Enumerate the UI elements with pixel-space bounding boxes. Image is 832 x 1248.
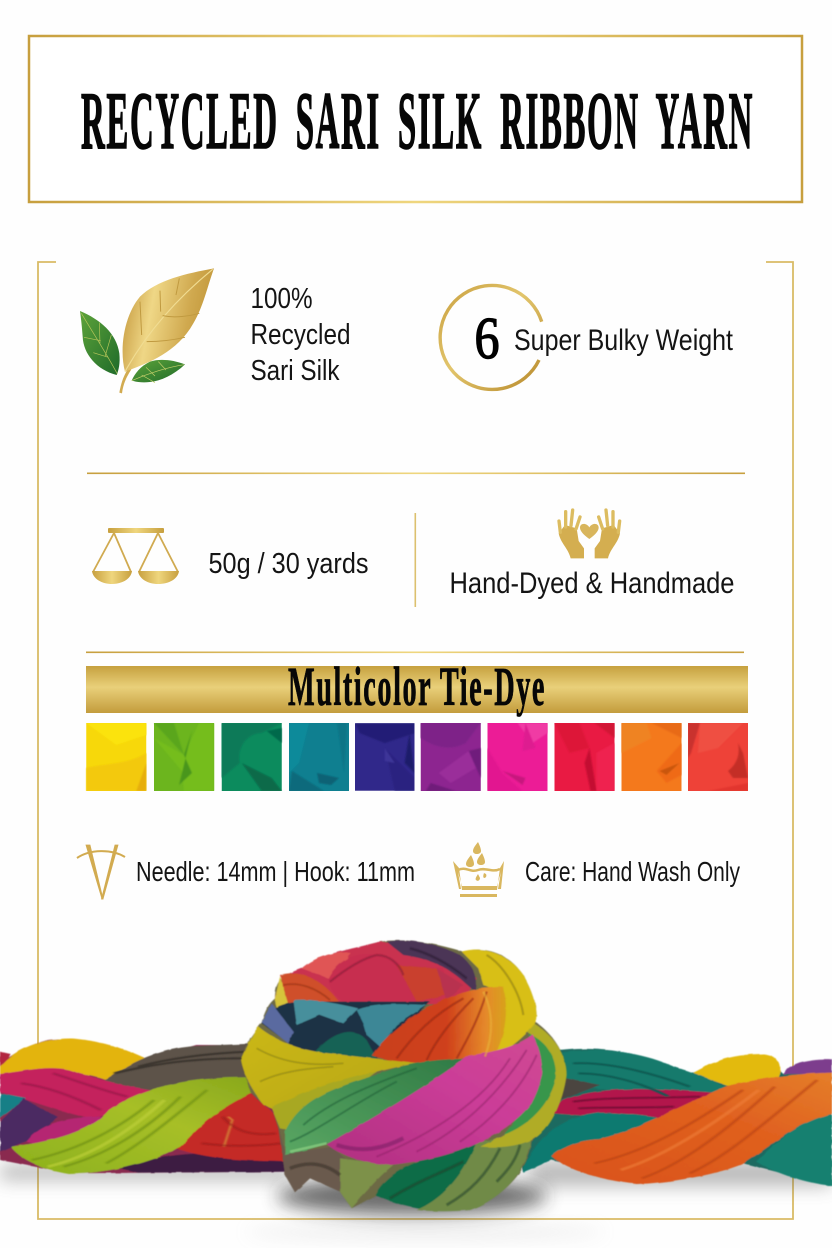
swatch: crimson bbox=[554, 723, 615, 791]
icon: hand wash basin bbox=[453, 842, 504, 897]
yarn braids bbox=[0, 1039, 832, 1186]
swatch: yellow bbox=[86, 723, 147, 791]
banner: multicolor tie-dye: Multicolor Tie-Dye bbox=[288, 656, 546, 717]
text: weight and length: 50g / 30 yards bbox=[208, 548, 368, 580]
floor shadows bbox=[0, 1160, 832, 1238]
swatch: magenta bbox=[487, 723, 548, 791]
icon: balance scale bbox=[92, 528, 179, 584]
text: super bulky weight: Super Bulky Weight bbox=[514, 324, 734, 357]
swatch: green bbox=[154, 723, 215, 791]
left hand bbox=[559, 510, 584, 558]
text: 100% recycled sari silk bbox=[250, 283, 350, 387]
swatch: coral bbox=[688, 723, 748, 791]
text: hand-dyed and handmade: Hand-Dyed & Handmade bbox=[450, 567, 734, 600]
icon: weight 6 ring: 6 bbox=[474, 305, 500, 371]
icon: hands and heart bbox=[559, 510, 620, 558]
text: care instructions: Care: Hand Wash Only bbox=[525, 856, 740, 887]
heart bbox=[580, 524, 599, 539]
banner: multicolor tie-dye bbox=[86, 656, 748, 717]
swatch: purple bbox=[420, 723, 482, 791]
icon: knitting needles and hook bbox=[77, 845, 125, 899]
icon: gold and green leaves bbox=[80, 268, 214, 393]
icon: weight 6 ring bbox=[440, 285, 542, 389]
content border brackets bbox=[38, 262, 793, 1219]
colour swatches bbox=[86, 723, 748, 791]
swatch: indigo bbox=[355, 723, 414, 791]
central yarn knot bbox=[241, 940, 567, 1211]
left braid bbox=[0, 1039, 287, 1174]
swatch: teal bbox=[289, 723, 349, 791]
title frame bbox=[29, 36, 802, 202]
right braid bbox=[523, 1049, 832, 1186]
text: 100% recycled sari silk: Sari Silk bbox=[250, 355, 340, 387]
swatch: emerald bbox=[221, 723, 282, 791]
text: 100% recycled sari silk: 100% bbox=[250, 283, 312, 315]
swatch: orange bbox=[621, 723, 682, 791]
text: needle and hook size: Needle: 14mm | Hook: 11mm bbox=[136, 856, 415, 887]
right hand bbox=[595, 510, 620, 558]
text: 100% recycled sari silk: Recycled bbox=[250, 319, 350, 351]
